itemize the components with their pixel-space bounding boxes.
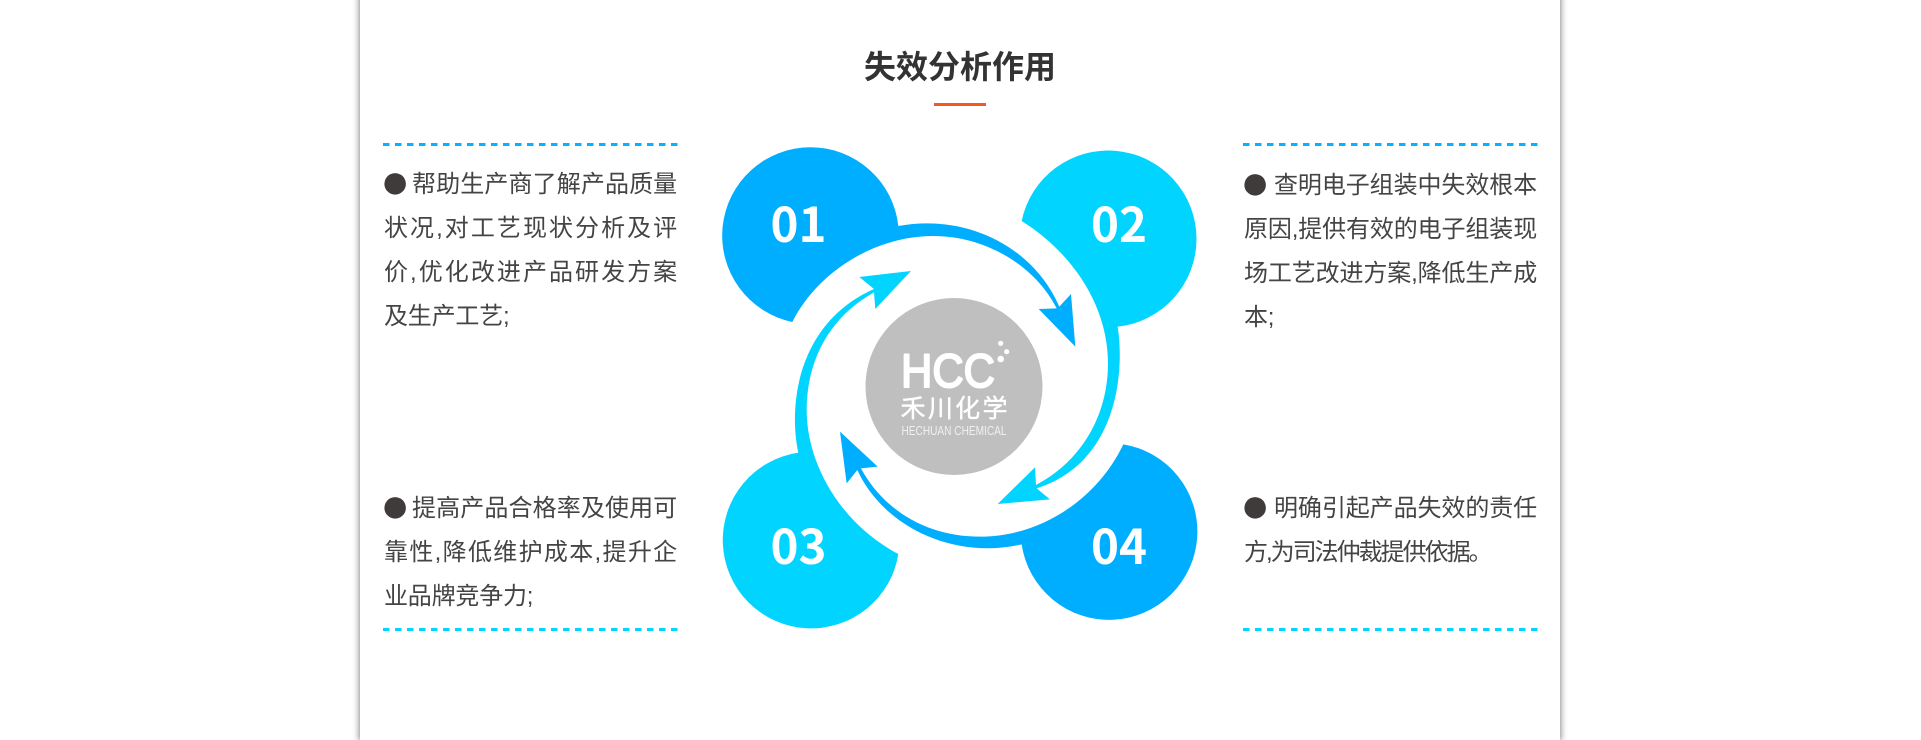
dashed rule: top left [383,143,678,146]
title: 失效分析作用 [864,49,1056,85]
dashed rule: bottom right [1243,628,1538,631]
number 02: 02 [1091,186,1147,256]
center logo: HECHUAN CHEMICAL [902,424,1007,438]
text block: item 03 [380,477,677,610]
text block: item 04 [1240,477,1537,566]
step 01 circle and arrow [722,147,1075,347]
panel: white card [360,0,1560,740]
text block: item 02: 原因,提供有效的电子组装现 [1244,216,1537,243]
text block: item 01: 及生产工艺; [384,303,509,330]
number 03: 03 [770,508,826,578]
title underline [934,103,986,106]
text block: item 02: 场工艺改进方案,降低生产成 [1244,260,1537,287]
text block: item 02: ● [1240,154,1270,210]
text block: item 03: 提高产品合格率及使用可 [412,495,677,522]
text block: item 02: 查明电子组装中失效根本 [1274,172,1537,199]
text block: item 03: ● [380,477,410,533]
text block: item 02 [1240,154,1537,331]
center logo: 禾川化学 [900,395,1008,423]
text block: item 03: 业品牌竞争力; [384,583,533,610]
step 03 circle and arrow [723,271,911,628]
number 01: 01 [770,186,826,256]
text block: item 04: ● [1240,477,1270,533]
dashed rule: bottom left [383,628,678,631]
center logo: HCC [901,344,995,397]
text block: item 03: 靠性,降低维护成本,提升企 [384,539,677,566]
text block: item 04: 明确引起产品失效的责任 [1274,495,1537,522]
text block: item 01 [380,153,677,330]
center logo [866,298,1042,475]
dashed rule: top right [1243,143,1538,146]
text block: item 01: 帮助生产商了解产品质量 [412,171,677,198]
step 04 circle and arrow [840,432,1197,620]
text block: item 01: 价,优化改进产品研发方案 [384,259,677,286]
text block: item 02: 本; [1244,304,1274,331]
text block: item 01: 状况,对工艺现状分析及评 [384,215,677,242]
number 04: 04 [1091,508,1147,578]
text block: item 04: 方,为司法仲裁提供依据。 [1244,539,1491,566]
text block: item 01: ● [380,153,410,209]
step 02 circle and arrow [998,151,1197,504]
